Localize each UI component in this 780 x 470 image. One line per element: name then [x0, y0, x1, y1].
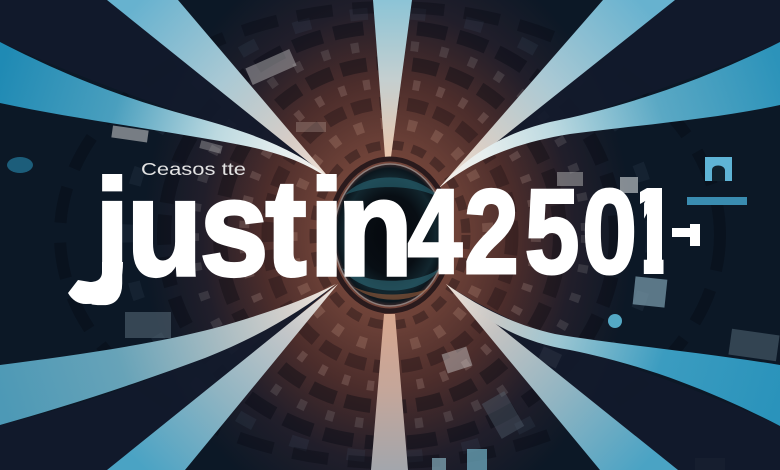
- central lens: [329, 159, 451, 311]
- beam: bottom-right straight: [446, 284, 678, 470]
- main title: justin: [92, 151, 413, 304]
- main title: [68, 151, 664, 304]
- small heading: Ceasos tte: [141, 159, 246, 179]
- beam: top-right curved: [439, 42, 780, 188]
- main title: 1: [642, 165, 664, 298]
- beam: top-left curved: [0, 42, 331, 180]
- beam: bottom-left curved: [0, 284, 336, 425]
- trailing tick mark: [672, 224, 700, 246]
- beam: bottom-right curved: [446, 284, 780, 426]
- beam: bottom-left straight: [107, 284, 338, 470]
- beam: bottom centre: [371, 314, 408, 470]
- main title: 4250: [408, 166, 637, 299]
- beam: top centre: [373, 0, 412, 157]
- beam: top-left straight: [107, 0, 331, 180]
- beam: top-right straight: [439, 0, 675, 188]
